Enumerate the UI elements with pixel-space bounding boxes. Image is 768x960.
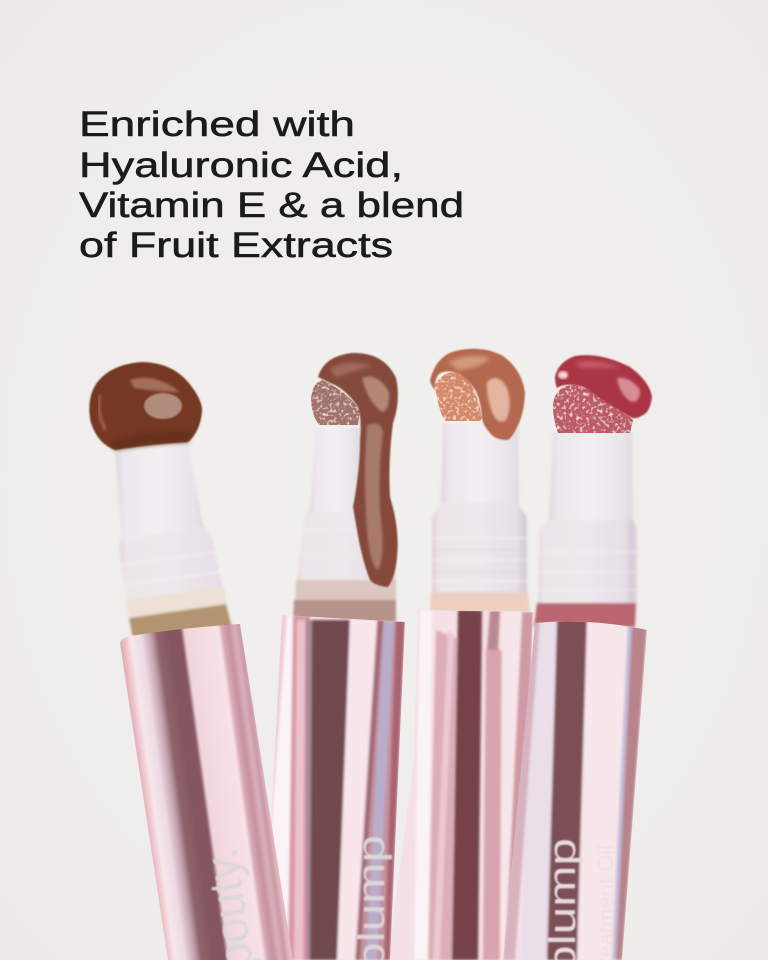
headline: Hyaluronic Acid,	[79, 146, 403, 185]
metal body 4	[500, 615, 650, 960]
applicator 2	[293, 427, 396, 622]
applicator 4	[534, 432, 637, 630]
gloss blob 3	[430, 349, 525, 440]
applicator 1	[115, 442, 232, 645]
gloss dome 1	[89, 362, 202, 450]
tube 4: red shade	[500, 355, 652, 960]
tube 3: peach shade	[390, 348, 533, 960]
metal body 1	[120, 624, 293, 960]
gloss drip 2	[318, 353, 398, 587]
headline: of Fruit Extracts	[79, 226, 393, 265]
metal body 2	[271, 615, 405, 960]
sponge 2	[311, 380, 360, 425]
tube 2: chocolate drip shade	[271, 352, 405, 960]
headline: Enriched with	[79, 105, 355, 144]
sponge 4	[553, 385, 633, 433]
tube 1: brown dome shade	[89, 362, 300, 960]
gloss blob 4	[555, 355, 652, 418]
sponge 3	[435, 372, 482, 421]
applicator 3	[430, 423, 530, 612]
headline	[79, 105, 464, 265]
headline: Vitamin E & a blend	[79, 186, 464, 225]
metal body 3	[390, 610, 533, 960]
